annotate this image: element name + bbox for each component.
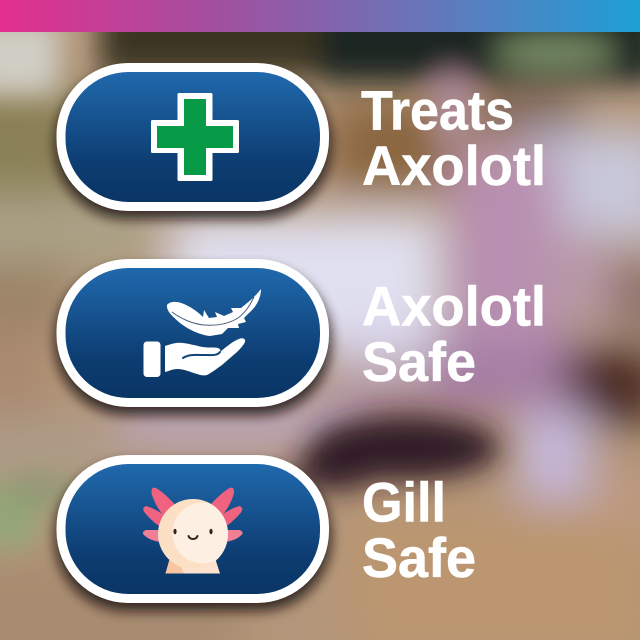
icon: feather over hand xyxy=(144,289,261,377)
label: axolotl safe: Safe xyxy=(362,330,476,393)
badge: gill safe xyxy=(55,455,331,611)
label: gill safe: Gill xyxy=(362,470,446,534)
label: treats axolotl: Treats xyxy=(361,78,514,142)
label: treats axolotl: Axolotl xyxy=(362,134,546,197)
badge: axolotl safe xyxy=(55,259,331,415)
icon: axolotl face xyxy=(143,488,243,574)
icon: green cross xyxy=(151,93,239,181)
label: gill safe xyxy=(362,470,476,589)
label: axolotl safe: Axolotl xyxy=(362,274,546,338)
badge: treats axolotl xyxy=(55,63,331,219)
label: treats axolotl xyxy=(361,78,546,197)
label: gill safe: Safe xyxy=(362,526,476,589)
label: axolotl safe xyxy=(362,274,546,393)
top gradient bar xyxy=(0,0,640,32)
